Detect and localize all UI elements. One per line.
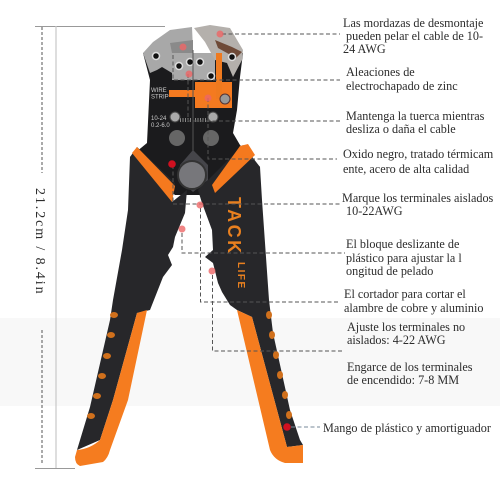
head body [130,53,260,195]
tool markings: 0.2-6.0 [151,123,170,129]
callout: jaws: 24 AWG [343,42,386,56]
callout: black oxide: ente, acero de alta calidad [343,162,469,176]
stripping jaws [143,25,243,80]
tool markings [151,88,170,129]
dimension lines [35,26,165,468]
callout: handle: Mango de plástico y amortiguador [323,421,491,435]
callout: alloys: electrochapado de zinc [346,79,458,93]
callout: jaws: Las mordazas de desmontaje [343,16,483,30]
callout: insulated terminals: 10-22AWG [346,204,403,218]
spring and screws [169,50,219,160]
callout: ignition terminals: de encendido: 7-8 MM [347,373,459,387]
callout: sliding block: ongitud de pelado [346,264,433,278]
tool: wire stripper [75,25,303,466]
callout: cutter: alambre de cobre y aluminio [344,301,483,315]
leader lines [173,34,345,427]
pivot [178,150,208,192]
tool markings: 10-24 [151,116,167,122]
callout: jaws: pueden pelar el cable de 10- [346,29,483,43]
callout: nut: Mantenga la tuerca mientras [346,109,485,123]
left handle [75,147,187,466]
callout: alloys: Aleaciones de [346,65,415,79]
callout: ignition terminals: Engarce de los terminales [347,360,473,374]
callout: sliding block: El bloque deslizante de [346,237,459,251]
callout: cutter: El cortador para cortar el [344,287,466,301]
brand [224,197,246,290]
orange slider [169,53,232,108]
callout: nut: desliza o daña el cable [346,122,456,136]
callout: sliding block: plástico para ajustar la l [346,251,462,265]
tool markings: STRIP [151,94,169,100]
callout: black oxide: Oxido negro, tratado térmicam [343,147,494,161]
dimension label: 21.2cm / 8.4in [32,188,47,295]
callout: non-insulated terminals: Ajuste los terminales no [347,320,465,334]
right handle [198,144,303,463]
callout: insulated terminals: Marque los terminales aislados [342,191,494,205]
brand: LIFE [235,262,246,290]
callout: non-insulated terminals: aislados: 4-22 AWG [347,333,446,347]
brand: TACK [224,197,244,256]
tool markings: WIRE [151,88,167,94]
callout markers [168,30,291,431]
